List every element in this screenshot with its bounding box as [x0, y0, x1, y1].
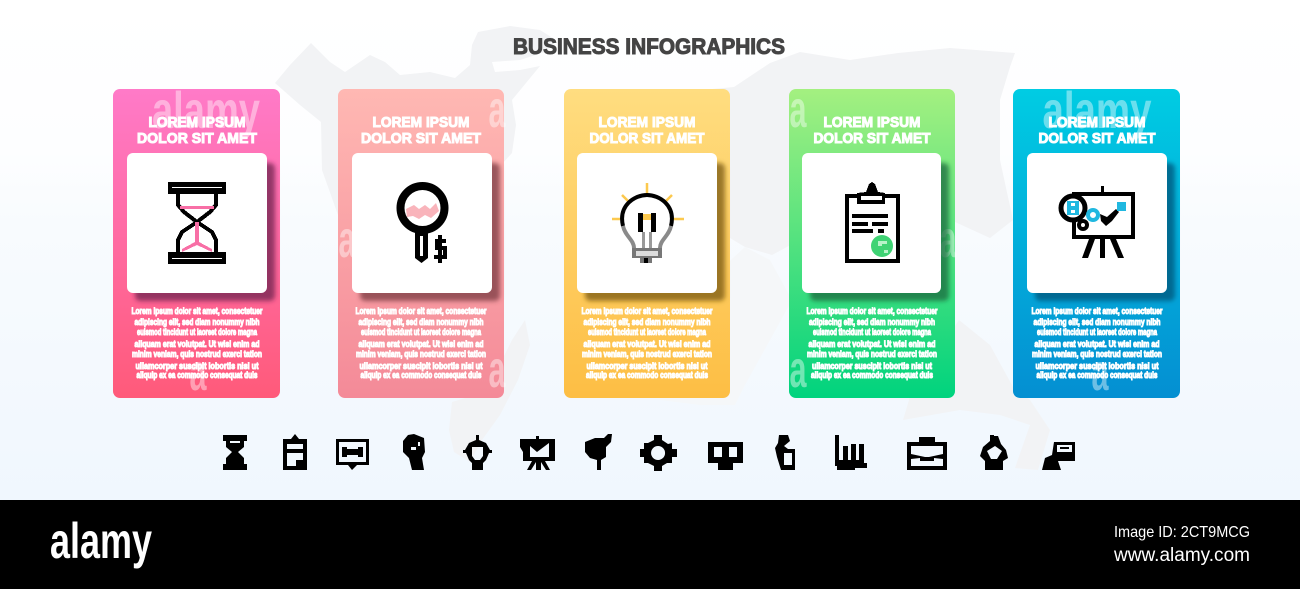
card 5 heading: LOREM IPSUM [1048, 114, 1146, 131]
card 5 white tile [1027, 153, 1167, 293]
card 2 body text: aliquam erat volutpat. Ut wisi enim ad [358, 339, 484, 349]
card 1 body text [132, 306, 263, 380]
card 5 body text [1032, 306, 1163, 380]
icon: small hourglass [223, 435, 247, 470]
card 3 body text: Lorem ipsum dolor sit amet, consectetuer [582, 306, 713, 316]
footer image id: www.alamy.com [1113, 545, 1250, 566]
icon: small bulb [463, 435, 492, 470]
icon: clipboard [845, 182, 900, 263]
icon: key with dollar [400, 186, 446, 263]
footer band [0, 500, 1300, 589]
card 2 body text: euismod tincidunt ut laoreet dolore magna [361, 327, 482, 337]
watermark letters: a [790, 81, 807, 139]
icon: small person gear [980, 435, 1008, 470]
card 2 body text [356, 306, 487, 380]
icon: small board [336, 439, 369, 470]
card 3 white tile [577, 153, 717, 293]
card 2 heading [361, 114, 481, 147]
watermark letters [790, 81, 957, 399]
card 3 body text: adipiscing elit, sed diam nonummy nibh [584, 317, 710, 327]
card 3 body text: euismod tincidunt ut laoreet dolore magna [588, 327, 707, 337]
title: BUSINESS INFOGRAPHICS [513, 34, 785, 59]
watermark letters: a [790, 341, 807, 399]
card 5 body text: ullamcorper suscipit lobortis nisl ut [1036, 361, 1158, 371]
card 3 body text: minim veniam, quis nostrud exerci tation [582, 349, 712, 359]
card 4 heading: DOLOR SIT AMET [814, 130, 930, 147]
footer logo: alamy [50, 513, 152, 569]
card 5 body text: Lorem ipsum dolor sit amet, consectetuer [1032, 306, 1163, 316]
card 3 body text: ullamcorper suscipit lobortis nisl ut [586, 361, 708, 371]
watermark letters: a [488, 341, 506, 399]
card 5 heading: DOLOR SIT AMET [1038, 130, 1156, 147]
card 5 shadow [1035, 163, 1175, 301]
card 3 heading: DOLOR SIT AMET [590, 130, 704, 147]
icon: small bar chart [835, 435, 867, 470]
card 3 shadow [585, 163, 725, 301]
watermark letters: a [338, 211, 356, 269]
icon: small key [403, 434, 425, 470]
card 4 body text: aliquam erat volutpat. Ut wisi enim ad [808, 339, 936, 349]
panel: card 3 light bulb [564, 89, 730, 398]
card 1 body text: Lorem ipsum dolor sit amet, consectetuer [132, 306, 263, 316]
watermark letter: a [1092, 344, 1109, 402]
icon: small chart board [520, 436, 555, 470]
card 4 body text: ullamcorper suscipit lobortis nisl ut [812, 361, 932, 371]
card 2 body text: aliquip ex ea commodo consequat duis [360, 370, 482, 380]
card 3 heading: LOREM IPSUM [598, 114, 696, 131]
card 5 heading [1038, 114, 1156, 147]
card 3 body text [582, 306, 713, 380]
icon: hourglass [168, 182, 226, 264]
icon: small pin [585, 434, 612, 470]
card 1 white tile [127, 153, 267, 293]
card 1 heading [137, 114, 257, 147]
icon row [223, 434, 1075, 471]
panel: card 5 presentation board [1013, 82, 1180, 402]
card 4 body text: euismod tincidunt ut laoreet dolore magna [813, 327, 932, 337]
card 2 body text: adipiscing elit, sed diam nonummy nibh [358, 317, 484, 327]
icon: small meeting board [1042, 442, 1075, 470]
card 5 body text: adipiscing elit, sed diam nonummy nibh [1034, 317, 1160, 327]
card 1 body text: minim veniam, quis nostrud exerci tation [132, 349, 262, 359]
card 1 body text: euismod tincidunt ut laoreet dolore magna [137, 327, 258, 337]
icon: presentation board [1061, 186, 1135, 258]
card 4 body text: adipiscing elit, sed diam nonummy nibh [809, 317, 935, 327]
card 1 body text: ullamcorper suscipit lobortis nisl ut [136, 361, 258, 371]
watermark letter: a [190, 344, 207, 402]
world map silhouette [275, 26, 1050, 470]
card 4 shadow [810, 163, 949, 301]
card 5 body text: minim veniam, quis nostrud exerci tation [1032, 349, 1162, 359]
panel: card 4 clipboard [789, 81, 957, 399]
footer image id: Image ID: 2CT9MCG [1114, 524, 1250, 541]
card 4 body text: minim veniam, quis nostrud exerci tation [807, 349, 937, 359]
panel: card 2 key [338, 81, 506, 399]
card 1 heading: DOLOR SIT AMET [137, 130, 257, 147]
card 5 body text: aliquam erat volutpat. Ut wisi enim ad [1034, 339, 1160, 349]
icon: small briefcase [907, 437, 947, 470]
icon: light bulb [612, 183, 684, 263]
card 4 body text: aliquip ex ea commodo consequat duis [811, 370, 933, 380]
card 5 body text: aliquip ex ea commodo consequat duis [1036, 370, 1158, 380]
card 2 heading: LOREM IPSUM [372, 114, 470, 131]
icon: small monitor [708, 442, 743, 470]
card 2 body text: Lorem ipsum dolor sit amet, consectetuer [356, 306, 487, 316]
card 1 body text: aliquip ex ea commodo consequat duis [136, 370, 258, 380]
card 1 body text: adipiscing elit, sed diam nonummy nibh [134, 317, 260, 327]
card 3 body text: aliquam erat volutpat. Ut wisi enim ad [584, 339, 710, 349]
card 2 heading: DOLOR SIT AMET [361, 130, 481, 147]
card 2 shadow [360, 163, 500, 301]
icon: small clipboard [283, 434, 307, 470]
card 4 white tile [802, 153, 941, 293]
watermark: alamy [1042, 82, 1152, 140]
card 1 heading: LOREM IPSUM [148, 114, 246, 131]
watermark letters: a [940, 211, 957, 269]
card 5 body text: euismod tincidunt ut laoreet dolore magna [1037, 327, 1158, 337]
panel: card 1 hourglass [113, 82, 280, 402]
card 2 white tile [352, 153, 492, 293]
watermark: alamy [152, 82, 260, 140]
card 3 heading [590, 114, 704, 147]
watermark letters [338, 81, 506, 399]
card 4 body text [806, 306, 938, 380]
card 3 body text: aliquip ex ea commodo consequat duis [586, 370, 708, 380]
card 1 shadow [135, 163, 275, 301]
icon: small gear [640, 435, 677, 471]
icon: small dollar hand [775, 435, 795, 470]
card 4 heading [814, 114, 930, 147]
card 2 body text: minim veniam, quis nostrud exerci tation [356, 349, 486, 359]
card 4 body text: Lorem ipsum dolor sit amet, consectetuer [806, 306, 938, 316]
footer image id [1113, 524, 1250, 566]
card 1 body text: aliquam erat volutpat. Ut wisi enim ad [134, 339, 260, 349]
watermark letters: a [488, 81, 506, 139]
card 4 heading: LOREM IPSUM [824, 114, 920, 131]
card 2 body text: ullamcorper suscipit lobortis nisl ut [360, 361, 482, 371]
